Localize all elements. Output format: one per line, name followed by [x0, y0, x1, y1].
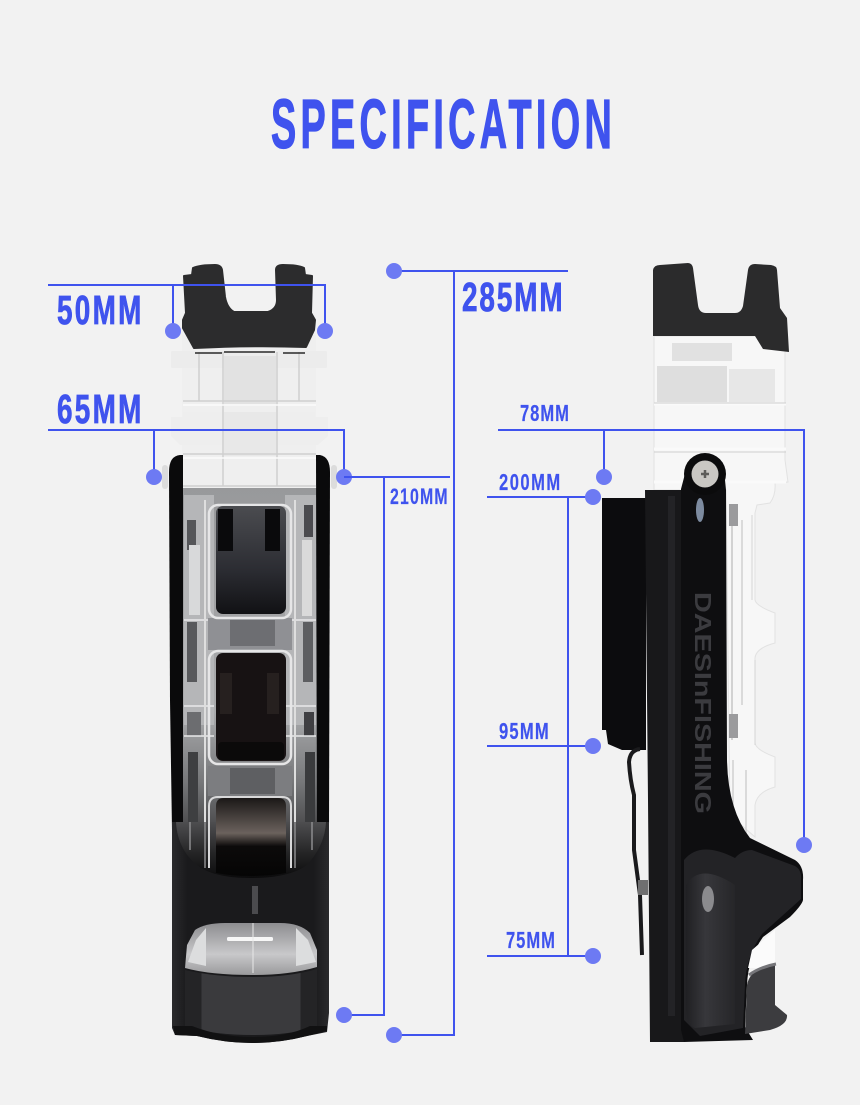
black cap: [183, 265, 315, 348]
side columns: [184, 495, 316, 870]
window 3 frame: [209, 797, 291, 868]
label: 78MM: [520, 401, 569, 427]
leader lines: [498, 430, 804, 845]
window frames: [209, 505, 291, 764]
label: 285MM: [462, 275, 563, 320]
lower black housing: [172, 822, 329, 1043]
label: 75MM: [506, 928, 555, 954]
marker: [585, 489, 601, 505]
bowl verticals: [190, 822, 312, 868]
clear body: [654, 336, 788, 837]
clip wire: [629, 749, 642, 955]
brand lettering: DAESInFISHING: [690, 592, 716, 814]
pivot screw: [684, 453, 726, 495]
label: 65MM: [57, 387, 141, 432]
marker: [585, 948, 601, 964]
leader lines: [48, 430, 344, 477]
leader line: [487, 955, 593, 957]
clip tab: [638, 880, 648, 895]
markers: [386, 263, 402, 1043]
lower glass opening: [185, 923, 317, 975]
black frame left and right: [169, 455, 330, 830]
dimension: 285mm: [386, 263, 568, 1043]
marker: [585, 738, 601, 754]
label: 50MM: [57, 288, 141, 333]
bowl of glass above housing: [176, 822, 326, 878]
clear upper body: [171, 335, 328, 495]
marker: [336, 1007, 352, 1023]
label: 200MM: [499, 470, 560, 496]
pivot arm and housing: [681, 456, 803, 1042]
back plate: [645, 490, 684, 1042]
leader lines: [487, 497, 593, 956]
leader lines: [344, 477, 450, 1015]
dimension: 65mm: [48, 387, 352, 485]
clip box: [602, 498, 646, 750]
product: side view: [602, 263, 803, 1042]
markers: [596, 469, 812, 853]
label: 210MM: [390, 486, 448, 510]
clear body details: [654, 343, 786, 835]
window 3: [216, 798, 286, 876]
cup shadow: [749, 964, 776, 975]
crossbars: [208, 618, 292, 796]
foot: [173, 1026, 327, 1043]
label: 95MM: [499, 719, 549, 745]
clear socket band: [748, 930, 775, 968]
dimension: 75mm: [487, 928, 601, 964]
leader line: [487, 745, 593, 747]
product: front view: [162, 265, 337, 1043]
cup: [185, 969, 317, 1035]
housing body tone: [684, 849, 801, 1036]
dimension: 200mm: [487, 470, 601, 956]
glass window panel: [180, 488, 319, 833]
highlight on arm: [696, 498, 704, 522]
leader lines: [48, 285, 325, 331]
centre seam: [252, 886, 258, 914]
title: SPECIFICATION: [271, 85, 612, 163]
dimension: 78mm: [498, 401, 812, 853]
window 2: [216, 653, 286, 761]
markers: [165, 323, 333, 339]
pivot studs: [162, 465, 337, 489]
markers: [146, 469, 352, 485]
lower grey panel: [686, 874, 735, 1028]
black cap: [653, 263, 789, 352]
window 1: [216, 506, 286, 614]
dimension: 95mm: [487, 719, 601, 754]
leader lines: [394, 271, 568, 1035]
light slot: [702, 886, 714, 912]
dimension: 50mm: [48, 285, 333, 339]
side cup: [745, 963, 787, 1034]
plate ridge: [668, 496, 675, 1016]
dimension: 210mm: [336, 477, 450, 1023]
